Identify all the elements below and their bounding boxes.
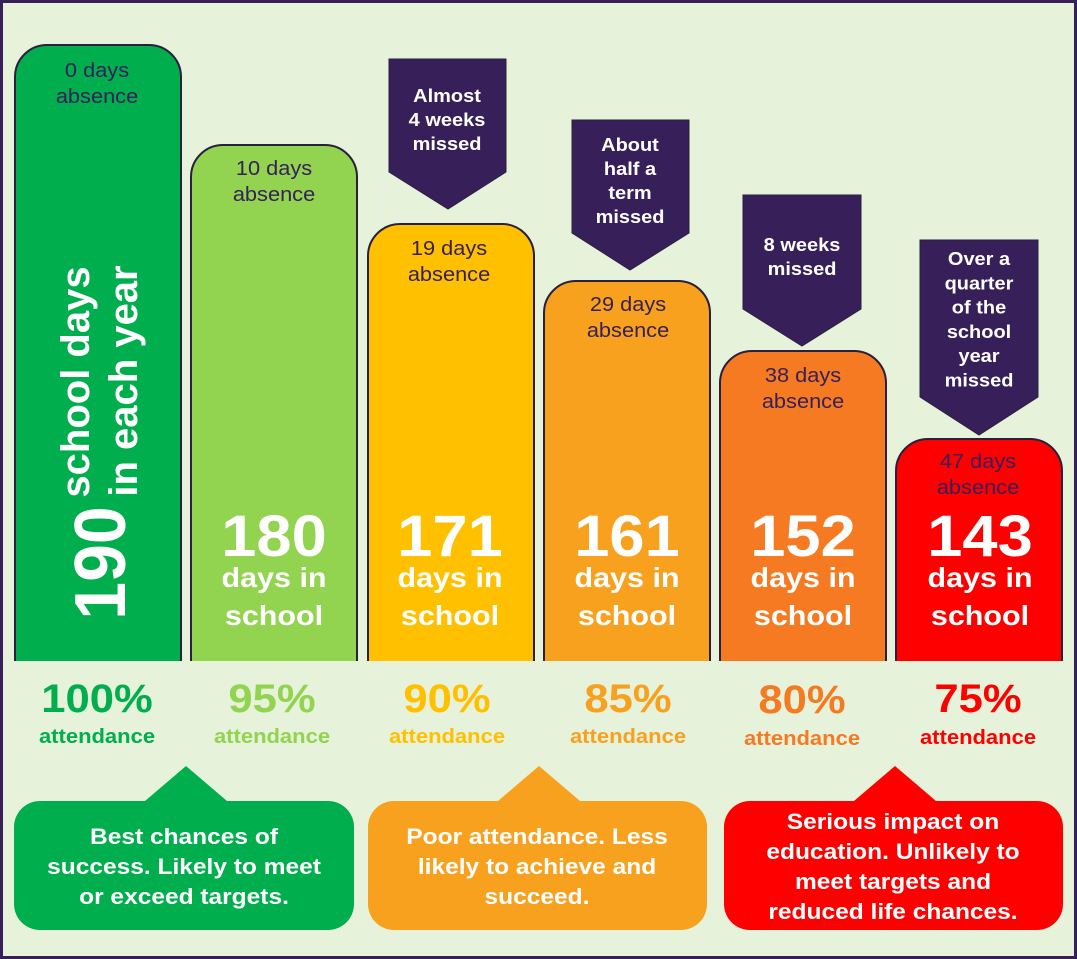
callout: over a quarter of the school year missed: quarter: [945, 274, 1014, 294]
message box: poor attendance: [368, 766, 707, 930]
column: 80% attendance: [720, 195, 886, 750]
column: 90% attendance: [368, 59, 534, 748]
days in school: 171: school: [401, 600, 499, 632]
callout: 8 weeks missed: [743, 195, 861, 346]
days in school: 143: school: [931, 600, 1029, 632]
callout: about half a term missed: missed: [596, 208, 664, 228]
message box: serious impact: [724, 766, 1063, 930]
days in school: 152: days in: [750, 562, 856, 594]
rotated label: 190 school days in each year: 190: [60, 506, 140, 620]
message box: serious impact: education. Unlikely to: [766, 839, 1020, 864]
bar: 171 days: [368, 224, 534, 661]
message box: serious impact: meet targets and: [795, 869, 991, 894]
message box: best chances: success. Likely to meet: [47, 854, 321, 879]
absence label: 29 days: absence: [587, 320, 669, 342]
days in school: 161: days in: [574, 562, 680, 594]
message box: best chances: Best chances of: [90, 824, 278, 849]
absence label: 47 days: absence: [937, 477, 1019, 499]
days in school: 180: 180: [221, 503, 327, 568]
absence label: 0 days: 0 days: [65, 60, 129, 82]
callout: over a quarter of the school year missed: [920, 240, 1038, 435]
bar: 180 days: [191, 145, 357, 661]
rotated label: 190 school days in each year: in each year: [102, 265, 146, 497]
percentage: 100%: 100%: [41, 676, 153, 721]
message box: poor attendance: Poor attendance. Less: [406, 824, 668, 849]
message box: best chances: or exceed targets.: [79, 884, 289, 909]
days in school: 161: school: [578, 600, 676, 632]
callout: almost 4 weeks missed: [389, 59, 506, 209]
percentage: 95%: 95%: [228, 676, 316, 721]
caption: attendance: attendance: [744, 728, 860, 750]
days in school: 171: days in: [397, 562, 503, 594]
absence label: 10 days: absence: [233, 184, 315, 206]
callout: over a quarter of the school year missed: Over a: [948, 250, 1010, 270]
percentage: 85%: 85%: [584, 676, 672, 721]
days in school: 171: 171: [397, 503, 503, 568]
callout: about half a term missed: term: [608, 184, 652, 204]
rotated label: 190 school days in each year: school days: [54, 266, 98, 498]
bar: 152 days: [720, 351, 886, 661]
message box: poor attendance: likely to achieve and: [418, 854, 656, 879]
absence label: 29 days: 29 days: [590, 294, 666, 316]
callout: over a quarter of the school year missed: school: [947, 323, 1011, 343]
days in school: 143: 143: [927, 503, 1033, 568]
column: 85% attendance: [544, 120, 710, 748]
callout: almost 4 weeks missed: Almost: [413, 87, 481, 107]
absence label: 19 days: absence: [408, 264, 490, 286]
absence label: 19 days: 19 days: [411, 238, 487, 260]
bar: 161 days: [544, 281, 710, 661]
caption: attendance: attendance: [214, 726, 330, 748]
callout: about half a term missed: half a: [604, 160, 656, 180]
caption: attendance: attendance: [570, 726, 686, 748]
column: 95% attendance: [191, 145, 357, 748]
column: 75% attendance: [896, 240, 1062, 749]
callout: about half a term missed: About: [601, 136, 659, 156]
absence label: 38 days: 38 days: [765, 365, 841, 387]
callout: 8 weeks missed: missed: [768, 260, 836, 280]
percentage: 80%: 80%: [758, 677, 846, 722]
rotated label: 190 school days in each year: [54, 265, 146, 620]
callout: over a quarter of the school year missed: of the: [952, 298, 1006, 318]
percentage: 75%: 75%: [934, 676, 1022, 721]
days in school: 161: 161: [574, 503, 680, 568]
days in school: 143: days in: [927, 562, 1033, 594]
callout: about half a term missed: [572, 120, 689, 270]
message box: serious impact: reduced life chances.: [768, 899, 1018, 924]
absence label: 10 days: 10 days: [236, 158, 312, 180]
column: 100% attendance: [15, 45, 181, 748]
message box: best chances: [14, 766, 354, 930]
days in school: 180: school: [225, 600, 323, 632]
percentage: 90%: 90%: [403, 676, 491, 721]
days in school: 180: days in: [221, 562, 327, 594]
absence label: 38 days: absence: [762, 391, 844, 413]
bar: 143 days: [896, 439, 1062, 661]
absence label: 0 days: absence: [56, 86, 138, 108]
message box: serious impact: Serious impact on: [787, 809, 999, 834]
caption: attendance: attendance: [39, 726, 155, 748]
callout: almost 4 weeks missed: missed: [413, 135, 481, 155]
callout: almost 4 weeks missed: 4 weeks: [409, 111, 485, 131]
callout: 8 weeks missed: 8 weeks: [764, 236, 840, 256]
callout: over a quarter of the school year missed: year: [958, 347, 1000, 367]
days in school: 152: school: [754, 600, 852, 632]
caption: attendance: attendance: [389, 726, 505, 748]
bar: 190 school days: [15, 45, 181, 661]
caption: attendance: attendance: [920, 727, 1036, 749]
absence label: 47 days: 47 days: [940, 451, 1016, 473]
message box: poor attendance: succeed.: [485, 884, 589, 909]
callout: over a quarter of the school year missed: missed: [945, 371, 1013, 391]
days in school: 152: 152: [750, 503, 856, 568]
